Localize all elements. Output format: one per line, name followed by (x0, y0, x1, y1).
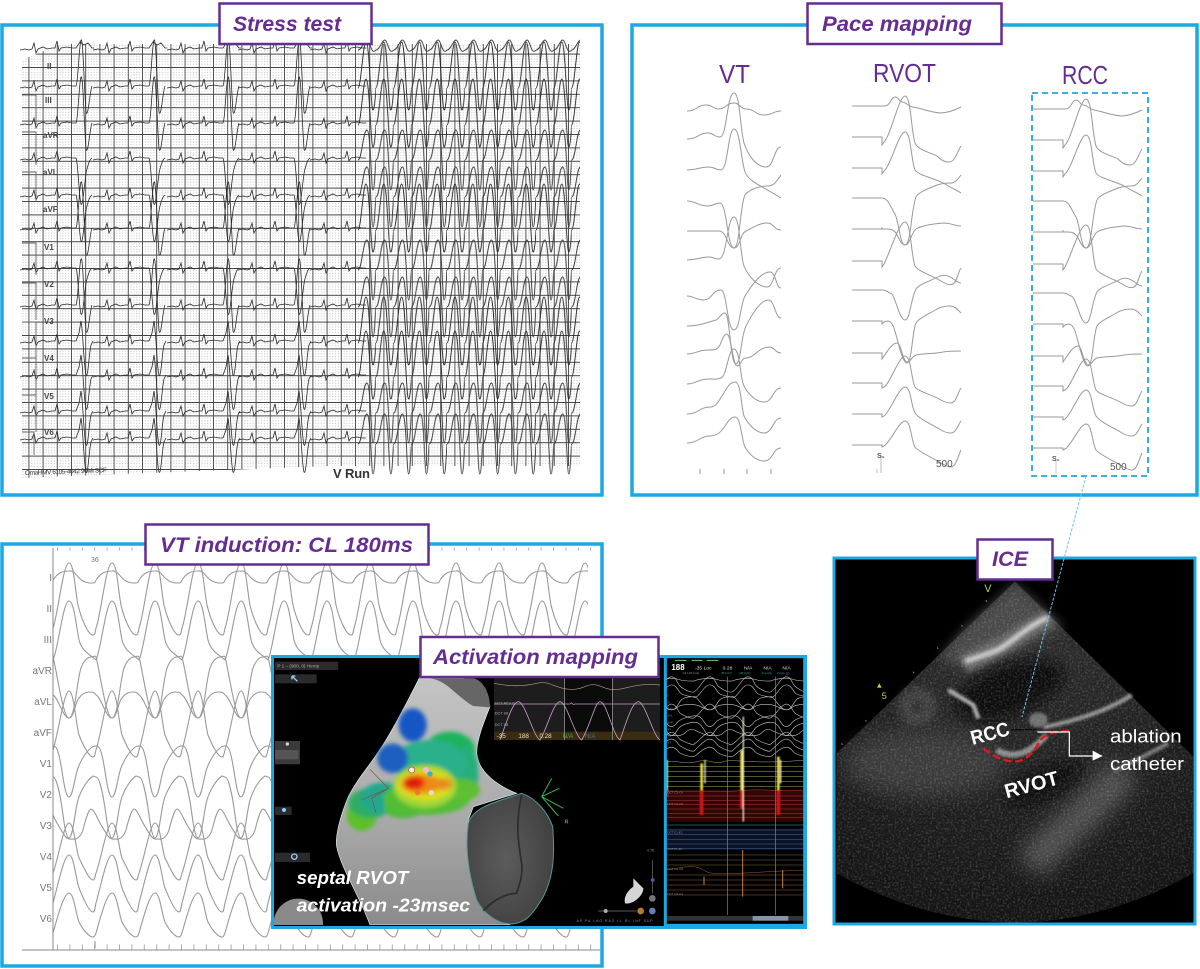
heading: VT induction: VT induction: CL 180ms (160, 534, 413, 557)
lead labels: aVR (33, 666, 52, 677)
inset electrogram strip: -35 (497, 733, 506, 740)
readout bar: 0.28 (723, 665, 733, 671)
readout bar: Force (g) (777, 671, 789, 675)
channel names: II (667, 694, 669, 698)
scrollbar (665, 916, 805, 921)
channel names: aVL (667, 714, 673, 718)
chart: RCC pace map traces: 500 (1110, 462, 1127, 473)
readout bar: -35 Loc (695, 665, 712, 671)
channel names: DCT G1-G2 (667, 867, 684, 871)
readout bar: μB (mV) (739, 671, 750, 675)
label: ablation catheter: ablation (1110, 726, 1182, 747)
chart: RVOT pace map traces: S₁ (877, 453, 885, 460)
inset electrogram strip: DCT 06 (495, 711, 509, 716)
column label: RCC: RCC (1062, 60, 1108, 90)
heading: VT induction (146, 524, 428, 564)
readout bar: N/A (763, 665, 772, 671)
lead labels: V6 (40, 914, 52, 925)
channel names: III (667, 700, 670, 704)
readout bar: CL LAT (ms) (683, 671, 699, 675)
catheter trace (362, 769, 388, 813)
toolbar controls: P 1 – (900, 0) Hemp (277, 664, 320, 669)
chart: induced VT 12-lead traces (22, 548, 612, 950)
panel: pace mapping (632, 4, 1197, 495)
heading: stress test: Stress test (233, 13, 342, 36)
caption: septal RVOT activation (296, 870, 470, 912)
orientation arrows (542, 778, 569, 826)
lead labels: V3 (40, 821, 52, 832)
lead labels: III (45, 96, 52, 105)
lead labels: V6 (44, 428, 54, 437)
arrow: catheter pointer (1037, 732, 1103, 761)
channel names: V3 (667, 740, 671, 744)
heading: pace mapping: Pace mapping (822, 13, 972, 36)
heading: activation mapping (420, 637, 658, 677)
lead labels: II (47, 62, 51, 71)
channel names: V1 (667, 727, 671, 731)
channel names: DCT E1-E2 (667, 830, 683, 834)
channel names (667, 687, 684, 896)
orientation heart and view buttons: 0.78 (647, 849, 654, 853)
lead labels: V4 (40, 852, 52, 863)
lead labels: III (44, 635, 52, 646)
lead labels (33, 573, 52, 925)
inset electrogram strip: DCT POLO (495, 701, 515, 706)
channel names: DCT F1-F2 (667, 847, 683, 851)
panel: activation mapping (272, 637, 810, 948)
orientation heart and view buttons (577, 849, 656, 923)
channel names: aVR (667, 707, 674, 711)
column label: VT: VT (719, 59, 750, 89)
lead labels: II (46, 604, 52, 615)
channel names: V2 (667, 734, 671, 738)
depth markers: V (984, 583, 992, 595)
caption: machine footer: OmaHMV 6105-4042 90Mi SCF (25, 467, 107, 477)
caption: septal RVOT activation: activation -23msec (297, 895, 471, 916)
channel names: aVF (667, 720, 673, 724)
navigation dial (274, 898, 323, 925)
depth markers (842, 583, 992, 745)
lead labels: I (49, 573, 52, 584)
panel: ICE image (834, 540, 1195, 924)
readout bar: N/A (782, 665, 791, 671)
label: RCC: RCC (968, 718, 1012, 750)
lead labels: V2 (44, 280, 54, 289)
orientation arrows: R (565, 820, 569, 826)
channel names: DCT C3-C4 (667, 790, 683, 794)
annotation: V Run: V Run (333, 466, 370, 481)
chart: RCC pace map traces: S₁ (1052, 456, 1060, 463)
activation colour map (347, 708, 480, 831)
lead labels: aVL (43, 168, 58, 177)
intracardiac traces (665, 677, 805, 915)
lead labels: V5 (40, 883, 52, 894)
3D activation map (274, 662, 660, 948)
label: ablation catheter (1110, 726, 1184, 774)
RVOT contour: red dashed line (983, 731, 1069, 762)
panel: stress test (2, 0, 602, 495)
callout box: RCC dashed highlight (1032, 93, 1148, 476)
toolbar controls (275, 662, 338, 862)
lead labels: V1 (40, 759, 52, 770)
ventricular spikes (667, 717, 781, 822)
caption: septal RVOT activation: septal RVOT (297, 867, 410, 888)
channel names: DCT H3-H4 (667, 892, 683, 896)
inset electrogram strip: 188 (518, 733, 529, 740)
chart: induced VT 12-lead traces: 36 (91, 557, 99, 564)
inset electrogram strip: 0.28 (539, 733, 552, 740)
channel bands (657, 677, 810, 850)
readout bar: N/A (744, 665, 753, 671)
depth markers: 5 (882, 691, 887, 701)
panel: VT induction (2, 524, 612, 966)
inset electrogram strip: N/A (585, 733, 596, 740)
channel names: DCT C5-C6 (667, 802, 683, 806)
electrogram column (657, 657, 810, 925)
chart: stress test 12-lead ECG (20, 39, 580, 478)
heading: stress test (220, 4, 372, 44)
chart: VT 12-lead traces (687, 93, 781, 474)
chart: RCC pace map traces (1033, 99, 1142, 474)
lead labels: V3 (44, 317, 54, 326)
channel names: I (667, 687, 668, 691)
lead labels (43, 62, 59, 437)
lead labels: aVF (43, 205, 58, 214)
inset electrogram strip: DCT 08 (495, 722, 509, 727)
lead labels: aVF (34, 728, 52, 739)
lead labels: V2 (40, 790, 52, 801)
connector: RCC box to ICE (1022, 476, 1086, 717)
tube opening (430, 678, 490, 707)
lead labels: aVL (34, 697, 52, 708)
label: ablation catheter: catheter (1110, 753, 1184, 774)
inset electrogram strip (494, 678, 660, 740)
ultrasound sector (837, 582, 1193, 923)
lead labels: V4 (44, 354, 54, 363)
inset electrogram strip: N/A (563, 733, 574, 740)
chart: RVOT pace map traces: 500 (936, 459, 953, 470)
lead labels: V1 (44, 243, 54, 252)
heart geometry: dark lobe (467, 793, 554, 924)
readout bar: 188 (671, 663, 685, 672)
heading: pace mapping (808, 4, 1002, 44)
heart geometry: grey shell (336, 677, 517, 925)
readout bar: Bi (mV) (722, 671, 732, 675)
chart: RVOT pace map traces (852, 96, 961, 473)
lead labels: V5 (44, 392, 54, 401)
heading: ICE: ICE (992, 548, 1029, 571)
column label: RVOT: RVOT (873, 58, 936, 88)
orientation heart and view buttons: AP PA LAO RAO LL RL INF SUP (577, 919, 653, 923)
heading: ICE (978, 540, 1052, 580)
lead labels: aVR (43, 131, 59, 140)
heading: activation mapping: Activation mapping (432, 646, 638, 669)
readout bar: Imp (Ω) (762, 671, 772, 675)
readout bar (671, 660, 791, 675)
label: RVOT: RVOT (1002, 768, 1061, 803)
